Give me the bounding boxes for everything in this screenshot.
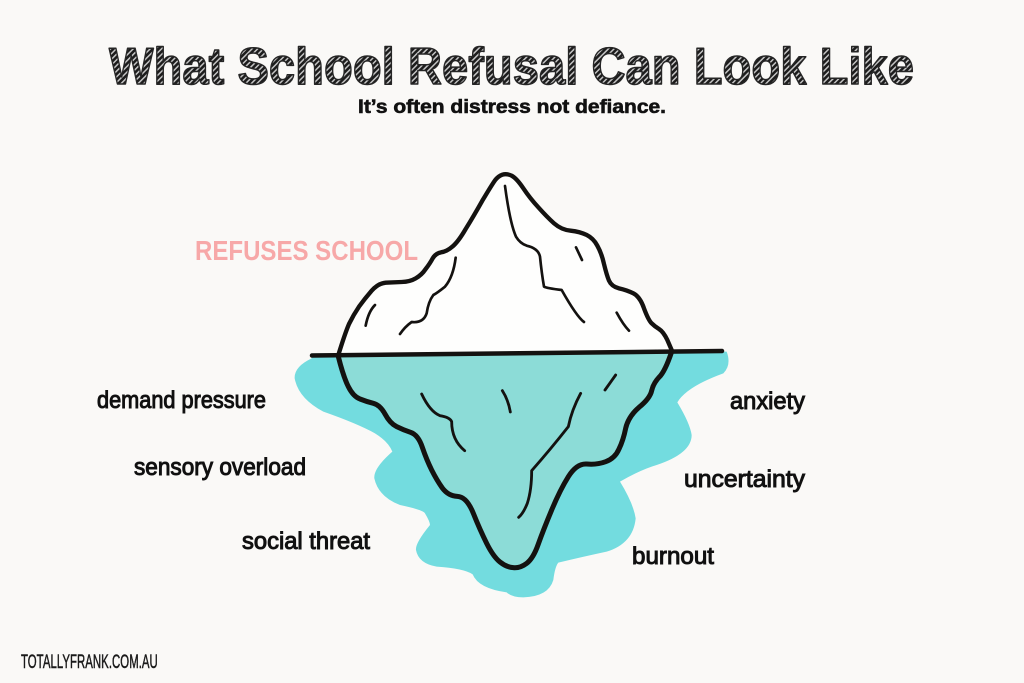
label: sensory overload: sensory overload <box>134 454 306 481</box>
waterline <box>312 351 722 356</box>
label: uncertainty: uncertainty <box>684 466 805 493</box>
iceberg above water <box>338 174 672 355</box>
water shape <box>295 352 729 597</box>
labels: hidden causes <box>97 387 805 570</box>
title: What School Refusal Can Look Like <box>109 38 914 96</box>
subtitle: It’s often distress not defiance. <box>358 97 666 118</box>
iceberg below water <box>338 352 672 568</box>
footer website: TOTALLYFRANK.COM.AU <box>21 652 158 673</box>
label: burnout: burnout <box>632 543 714 570</box>
label: demand pressure: demand pressure <box>97 387 266 414</box>
label: refuses school: REFUSES SCHOOL <box>195 235 418 266</box>
label: social threat: social threat <box>242 528 370 555</box>
label: anxiety: anxiety <box>730 388 805 415</box>
